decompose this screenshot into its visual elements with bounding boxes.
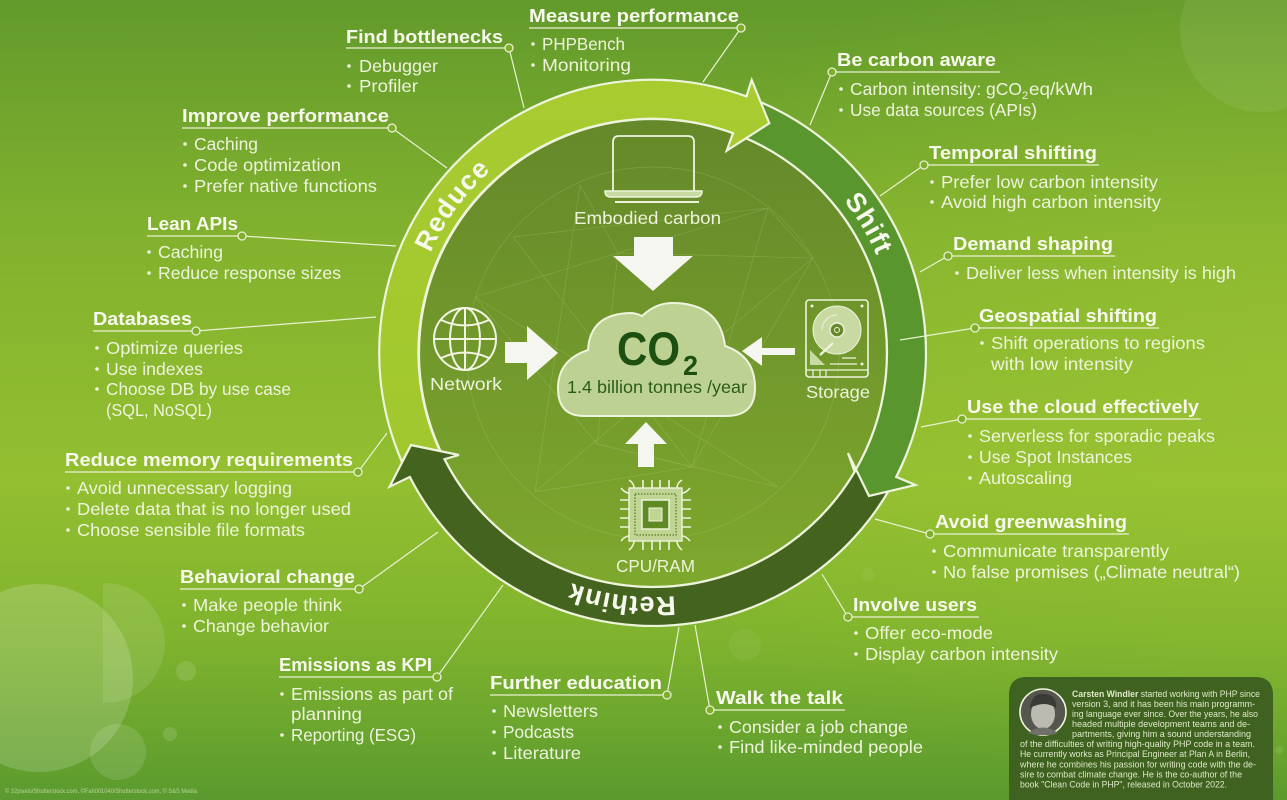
panel: author bio: where he combines his passion for writing code with the de- — [1019, 760, 1256, 770]
callout: be carbon aware: eq/kWh — [1029, 79, 1093, 99]
callout: walk the talk: Find like-minded people — [729, 737, 923, 757]
callout: geospatial shifting: Shift operations to regions — [991, 333, 1205, 353]
callout: lean apis: Caching — [158, 242, 223, 262]
panel: author bio: sire to combat climate change. He is the co-author of the — [1020, 770, 1242, 780]
callout: further education: Newsletters — [503, 701, 598, 721]
arrow: storage to cloud — [742, 337, 795, 366]
cloud: CO2 total: CO — [617, 322, 680, 375]
callout: emissions as kpi: Reporting (ESG) — [291, 725, 416, 745]
callout: behavioral change — [180, 532, 438, 636]
callout: improve performance: Prefer native functions — [194, 176, 377, 196]
callout: databases: Optimize queries — [106, 338, 243, 358]
callout: databases: Use indexes — [106, 359, 203, 379]
callout: emissions as kpi — [279, 585, 503, 745]
callout: measure performance: PHPBench — [542, 34, 625, 54]
panel: author bio: He currently works as Principal Engineer at Plan A in Berlin, — [1020, 749, 1250, 759]
callout: involve users: Offer eco-mode — [865, 623, 993, 643]
callout: walk the talk: Walk the talk — [716, 687, 844, 708]
callout: temporal shifting — [880, 142, 1161, 212]
callout: reduce memory requirements: Delete data that is no longer used — [77, 499, 351, 519]
label: network: Network — [430, 374, 502, 394]
arrow band: Rethink — [390, 441, 906, 626]
author photo — [1020, 689, 1066, 735]
callout: databases: (SQL, NoSQL) — [106, 400, 212, 420]
callout: demand shaping: Deliver less when intensity is high — [966, 263, 1236, 283]
callout: emissions as kpi: Emissions as part of — [291, 684, 453, 704]
callout: measure performance: Measure performance — [529, 5, 739, 26]
callout: reduce memory requirements: Reduce memory requirements — [65, 449, 353, 470]
panel: author bio: book "Clean Code in PHP", released in October 2022. — [1020, 780, 1227, 790]
callout: avoid greenwashing — [875, 511, 1240, 582]
callout: geospatial shifting: with low intensity — [990, 354, 1133, 374]
callout: reduce memory requirements: Avoid unnecessary logging — [77, 478, 292, 498]
callout: emissions as kpi: Emissions as KPI — [279, 654, 432, 675]
callout: improve performance: Caching — [194, 134, 258, 154]
arrow: cpu to cloud — [625, 422, 667, 467]
callout: behavioral change: Behavioral change — [180, 566, 355, 587]
callout: databases: Databases — [93, 308, 192, 329]
callout: use the cloud effectively: Use Spot Instances — [979, 447, 1132, 467]
callout: further education: Further education — [490, 672, 662, 693]
callout: further education: Literature — [503, 743, 581, 763]
callout: use the cloud effectively: Serverless for sporadic peaks — [979, 426, 1215, 446]
callout: measure performance: Monitoring — [542, 55, 631, 75]
callout: involve users — [822, 574, 1058, 664]
callout: involve users: Involve users — [853, 594, 977, 615]
callout: further education — [490, 627, 679, 763]
panel: author bio — [1009, 677, 1273, 800]
band label: Reduce: Reduce — [414, 163, 488, 252]
callout: behavioral change: Change behavior — [193, 616, 329, 636]
callout: demand shaping — [920, 233, 1236, 283]
arrow band: Reduce — [379, 80, 769, 462]
callout: lean apis: Lean APIs — [147, 213, 238, 234]
callout: temporal shifting: Temporal shifting — [929, 142, 1097, 163]
callout: temporal shifting: Avoid high carbon intensity — [941, 192, 1161, 212]
callout: temporal shifting: Prefer low carbon intensity — [941, 172, 1158, 192]
band label: Rethink: Rethink — [568, 583, 674, 616]
callout: geospatial shifting: Geospatial shifting — [979, 305, 1157, 326]
panel: author bio: ing language ever since. Over the years, he also — [1072, 709, 1258, 719]
callout: find bottlenecks: Debugger — [359, 56, 438, 76]
callout: find bottlenecks — [346, 26, 524, 108]
callout: behavioral change: Make people think — [193, 595, 342, 615]
callout: be carbon aware: Be carbon aware — [837, 49, 996, 70]
callout: walk the talk: Consider a job change — [729, 717, 908, 737]
callout: improve performance: Improve performance — [182, 105, 389, 126]
label: cpu/ram: CPU/RAM — [616, 556, 695, 576]
callout: avoid greenwashing: Avoid greenwashing — [935, 511, 1127, 532]
band label: Shift: Shift — [846, 192, 892, 255]
callout: be carbon aware: Use data sources (APIs) — [850, 100, 1037, 120]
callout: use the cloud effectively: Use the cloud effectively — [967, 396, 1200, 417]
callout: improve performance — [182, 105, 447, 196]
callout: reduce memory requirements — [65, 433, 387, 540]
callout: geospatial shifting — [900, 305, 1205, 374]
icon: laptop — [605, 136, 702, 202]
callout: emissions as kpi: planning — [291, 704, 362, 724]
panel: author bio: version 3, and it has been his main programm- — [1072, 699, 1255, 709]
callout: be carbon aware: Carbon intensity: gCO — [850, 79, 1022, 99]
callout: use the cloud effectively: Autoscaling — [979, 468, 1072, 488]
callout: avoid greenwashing: No false promises („Climate neutral“) — [943, 562, 1240, 582]
arrow: embodied carbon to cloud — [613, 237, 693, 291]
callout: databases: Choose DB by use case — [106, 379, 291, 399]
callout: be carbon aware — [810, 49, 1093, 125]
arrow band: Shift — [714, 89, 926, 496]
callout: avoid greenwashing: Communicate transparently — [943, 541, 1169, 561]
panel: author bio: of the difficulties of writing high-quality PHP code in a team. — [1020, 739, 1255, 749]
callout: find bottlenecks: Profiler — [359, 76, 418, 96]
callout: involve users: Display carbon intensity — [865, 644, 1058, 664]
panel: author bio: partments, giving him a sound understanding — [1072, 729, 1251, 739]
cloud: CO2 total: 2 — [683, 350, 698, 381]
label: storage: Storage — [806, 382, 870, 402]
callout: demand shaping: Demand shaping — [953, 233, 1113, 254]
callout: lean apis — [147, 213, 396, 283]
icon: cpu chip — [620, 480, 691, 550]
callout: lean apis: Reduce response sizes — [158, 263, 341, 283]
cloud: CO2 total: 1.4 billion tonnes /year — [567, 377, 747, 397]
panel: author bio: headed multiple development teams and de- — [1072, 719, 1250, 729]
callout: walk the talk — [695, 625, 923, 757]
icon: hard drive storage — [806, 300, 868, 377]
callout: databases — [93, 308, 376, 420]
callout: be carbon aware: 2 — [1022, 90, 1028, 102]
arrow: network to cloud — [505, 326, 558, 380]
image credits: © 32pixels/Shutterstock.com, ©Fah001040/Shutterstock.com, © S&S Media — [5, 788, 198, 795]
callout: find bottlenecks: Find bottlenecks — [346, 26, 503, 47]
callout: measure performance — [529, 5, 745, 82]
cloud: CO2 total — [558, 303, 755, 416]
callout: reduce memory requirements: Choose sensible file formats — [77, 520, 305, 540]
central disc — [419, 119, 887, 587]
callout: improve performance: Code optimization — [194, 155, 341, 175]
callout: use the cloud effectively — [921, 396, 1215, 488]
label: embodied carbon: Embodied carbon — [574, 208, 721, 228]
panel: author bio: Carsten Windler started working with PHP since — [1072, 689, 1260, 699]
icon: globe network — [434, 308, 496, 370]
callout: further education: Podcasts — [503, 722, 574, 742]
